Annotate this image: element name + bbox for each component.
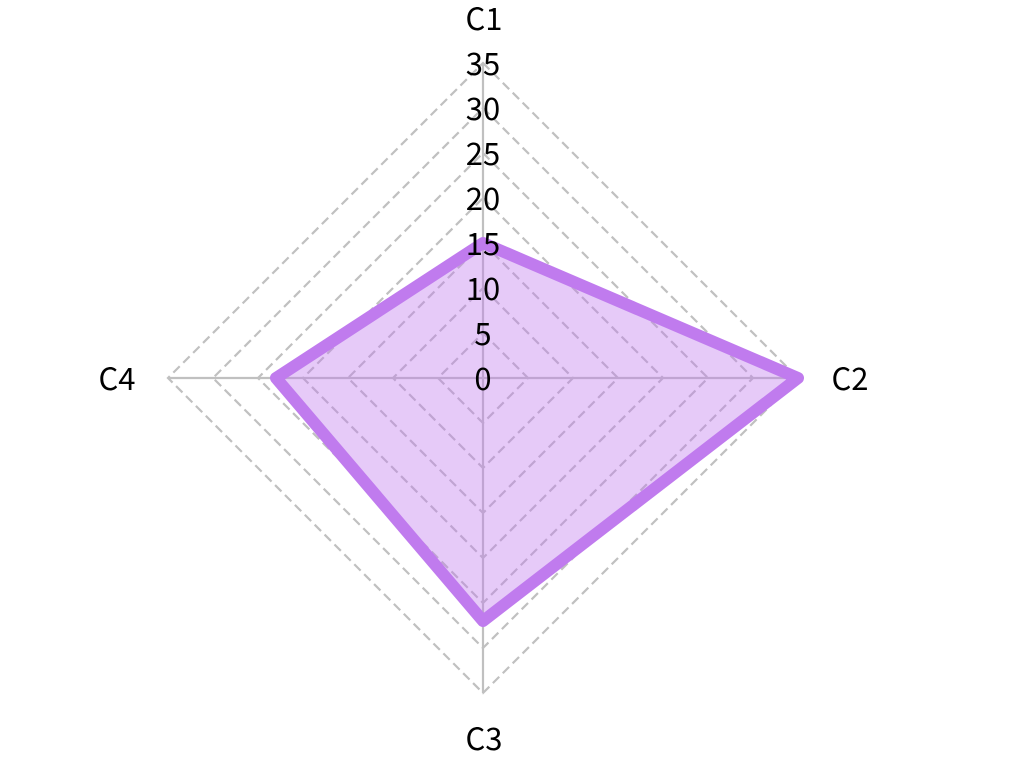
- radar grid: [168, 63, 798, 693]
- category label C4: C4: [99, 354, 135, 399]
- radial scale labels: 15: [466, 219, 500, 264]
- radial scale labels: [466, 39, 500, 399]
- radial axes: [168, 63, 798, 693]
- data series polygon: [276, 243, 798, 621]
- category label C3: C3: [466, 714, 502, 759]
- radial scale labels: 0: [474, 354, 492, 399]
- category label C2: C2: [832, 354, 868, 399]
- radial scale labels: 35: [466, 39, 500, 84]
- radial scale labels: 5: [474, 309, 492, 354]
- radial scale labels: 10: [466, 264, 500, 309]
- radial scale labels: 20: [466, 174, 500, 219]
- radial scale labels: 25: [466, 129, 500, 174]
- radial scale labels: 30: [466, 84, 500, 129]
